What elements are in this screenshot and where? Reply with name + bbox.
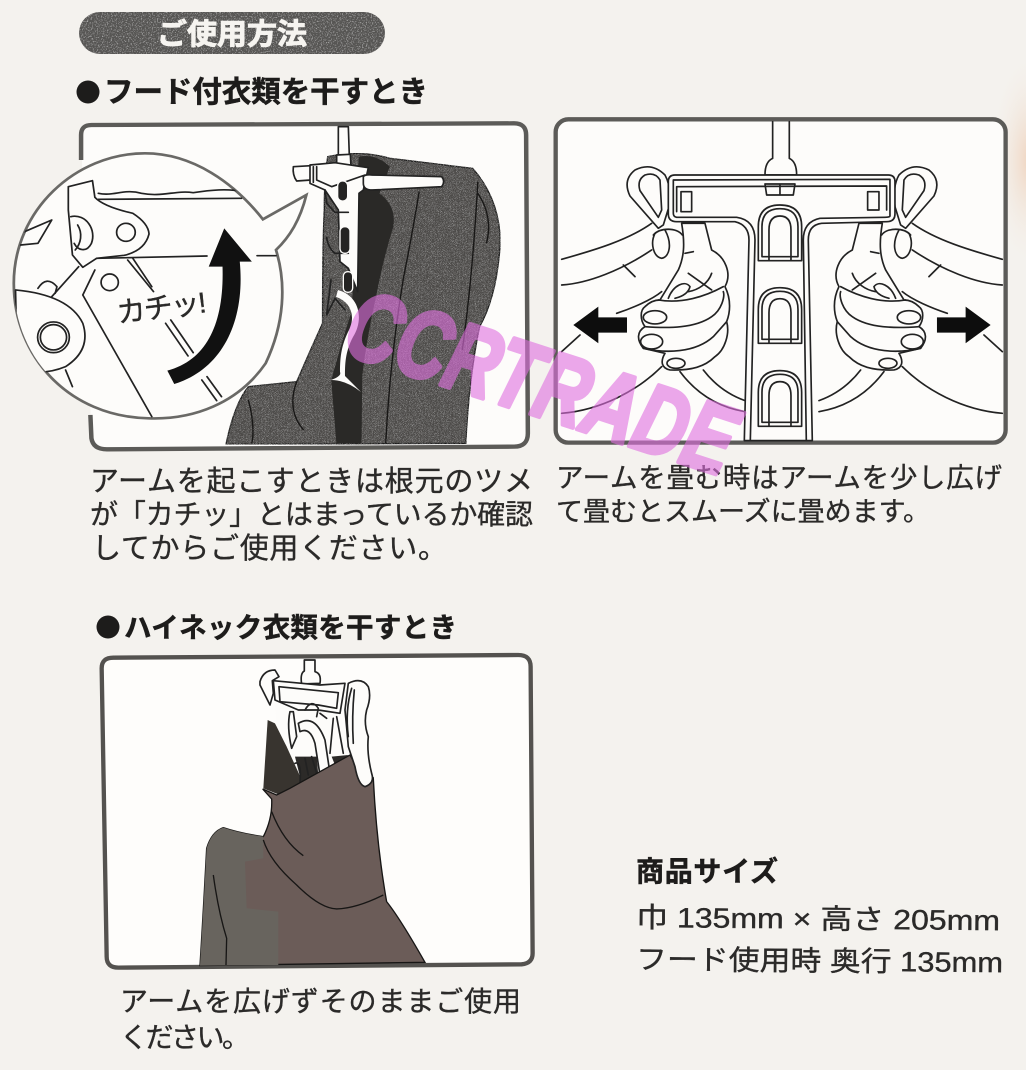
- panel: pulling arms outward to fold: [556, 119, 1006, 443]
- panel frame: [102, 655, 533, 968]
- T-shaped hanger body: [668, 175, 895, 441]
- caption: arm raise check: [90, 465, 533, 565]
- panel: high-neck garment on hanger: [102, 655, 533, 968]
- arrow: rotate arm upward: [167, 228, 252, 384]
- frame outline: [81, 123, 528, 449]
- heading: hooded garments: フード付衣類を干すとき: [104, 76, 428, 109]
- panel frame: [81, 123, 528, 449]
- heading: high-neck garments: ハイネック衣類を干すとき: [124, 612, 457, 643]
- product size block: [636, 855, 1003, 978]
- product size block: フード使用時 奥行 135mm: [636, 944, 1003, 978]
- heading pill: ご使用方法: ご使用方法: [157, 17, 307, 51]
- sweater: [200, 755, 425, 966]
- caption: arm raise check: してからご使用ください。: [92, 532, 447, 565]
- caption: use as is: [120, 986, 521, 1053]
- product size block: 商品サイズ: [636, 855, 778, 887]
- caption: folding arms: て畳むとスムーズに畳めます。: [556, 497, 930, 527]
- arrow: pull outward: [573, 307, 627, 343]
- hanger behind collar: [260, 660, 355, 795]
- click label: カチッ!: [115, 287, 208, 330]
- product size block: 巾 135mm × 高さ 205mm: [636, 902, 1000, 936]
- panel: hooded garment with click detail: [14, 123, 528, 449]
- hooded garment: [226, 153, 500, 444]
- hanger stem: [765, 122, 797, 175]
- hanger on hooded garment: [293, 127, 444, 315]
- right hanger arm over collar: [345, 681, 372, 787]
- caption: arm raise check: アームを起こすときは根元のツメ: [90, 465, 533, 498]
- white hook strap: [331, 290, 361, 392]
- heading pill: ご使用方法: [79, 12, 385, 54]
- caption: use as is: アームを広げずそのままご使用: [120, 986, 521, 1017]
- palm and fingers: [639, 223, 730, 370]
- caption: folding arms: アームを畳む時はアームを少し広げ: [556, 462, 1002, 493]
- caption: folding arms: [556, 462, 1002, 527]
- mechanism detail: [16, 181, 276, 417]
- panel frame: [556, 119, 1006, 443]
- caption: arm raise check: が「カチッ」とはまっているか確認: [90, 499, 533, 530]
- watermark: CCRTRADE: [334, 268, 752, 497]
- speech bubble with click detail: [14, 153, 306, 418]
- right hand, loop and arrow (mirrored): [819, 167, 1002, 413]
- caption: use as is: ください。: [120, 1022, 250, 1053]
- left hand, loop and arrow: [562, 167, 745, 413]
- hanger slots: [758, 205, 802, 426]
